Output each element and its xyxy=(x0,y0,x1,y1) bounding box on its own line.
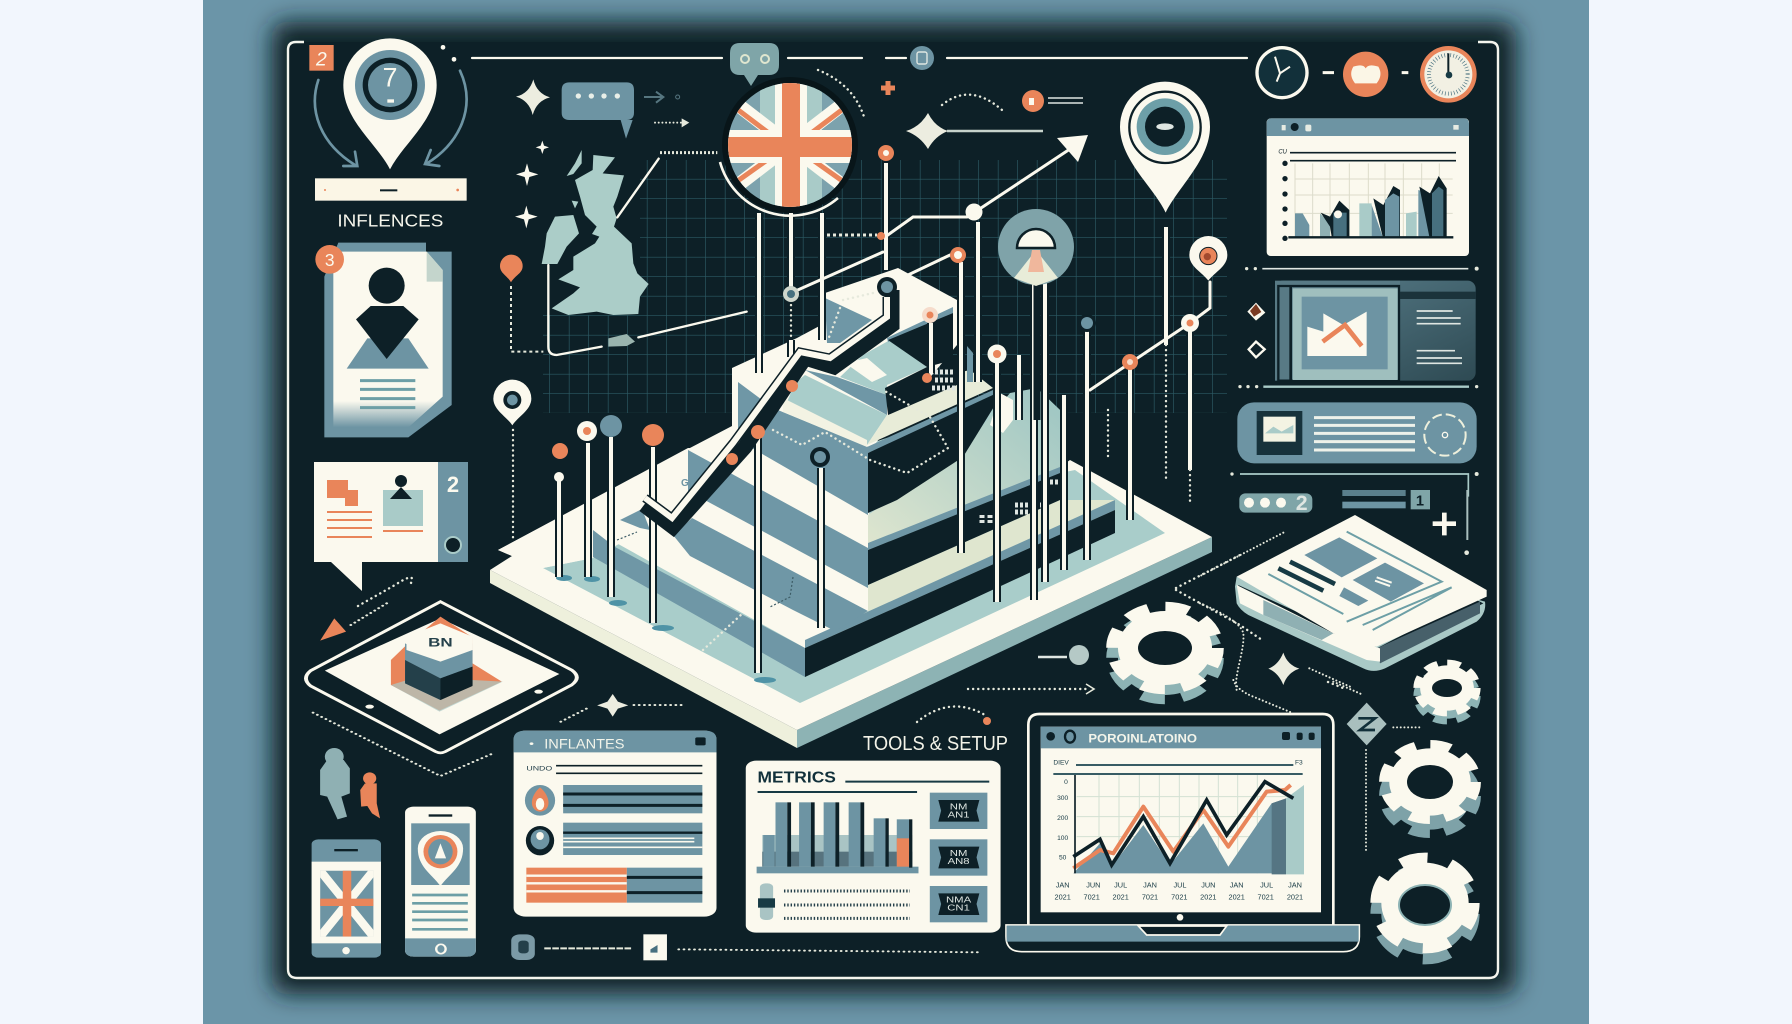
icon: dark circle xyxy=(526,826,554,855)
icon: small xyxy=(758,883,775,920)
pill: 2 xyxy=(1296,491,1308,515)
thumbnail xyxy=(1257,411,1302,455)
chart rules: DIEV xyxy=(1053,760,1069,767)
x axis labels: JAN xyxy=(1230,880,1244,889)
badge: number 2 xyxy=(309,45,334,71)
label: CU xyxy=(1278,149,1288,155)
divider one xyxy=(1245,267,1479,271)
icon: document circle xyxy=(910,46,934,70)
stair dashes xyxy=(773,390,948,473)
inner shadow area xyxy=(543,388,1165,703)
small label: Graa xyxy=(681,478,704,489)
icon: flame xyxy=(525,785,555,816)
x axis labels: JUL xyxy=(1173,880,1187,889)
panel: profile card xyxy=(315,243,452,437)
icon: bottom device xyxy=(511,934,535,960)
upper dark face B xyxy=(885,367,957,415)
dotted connector xyxy=(1200,603,1350,690)
text lines xyxy=(360,381,415,408)
envelope xyxy=(1307,312,1367,356)
printed dots on band xyxy=(982,482,1060,525)
badge: number 2: 2 xyxy=(315,49,327,70)
chart axis xyxy=(1288,234,1453,241)
divider three xyxy=(1230,472,1479,497)
upper dark face A xyxy=(888,313,953,367)
icon: circle xyxy=(445,537,461,553)
union flag xyxy=(725,83,855,207)
pin: orange xyxy=(500,255,523,282)
gears xyxy=(1116,609,1475,956)
black line xyxy=(1073,782,1293,865)
stat tiles: NMA xyxy=(946,896,972,905)
icon: orange circle xyxy=(1022,90,1044,112)
x axis labels: 7021 xyxy=(1142,892,1158,901)
dotted connectors xyxy=(313,602,686,776)
icon: orange plus xyxy=(881,81,895,95)
dotted connector xyxy=(358,578,412,606)
icon: teal person xyxy=(320,748,350,819)
gear: upper side xyxy=(1116,619,1214,697)
connector xyxy=(544,945,632,951)
dotted connector xyxy=(1200,533,1283,576)
notebook lines xyxy=(1268,532,1452,630)
tile: 1 xyxy=(1416,493,1424,509)
dotted connector xyxy=(827,234,877,236)
tier 1 lip xyxy=(805,500,1115,648)
stat tiles: AN1 xyxy=(948,811,970,820)
pole feet xyxy=(556,575,776,683)
y axis labels xyxy=(1057,779,1069,861)
tier 2 dark face xyxy=(868,473,1060,585)
icon: dots xyxy=(441,45,456,62)
y axis labels: 300 xyxy=(1057,795,1069,802)
chart grid xyxy=(1295,163,1453,237)
lower dashes xyxy=(703,613,743,650)
bars: orange stripes xyxy=(526,868,702,903)
tier 1 tread xyxy=(805,500,1115,648)
x axis labels: 7021 xyxy=(1171,892,1187,901)
icon: gauge xyxy=(1420,46,1477,103)
upper cream patch xyxy=(845,358,887,382)
pin: big xyxy=(1120,82,1210,213)
bars: row one xyxy=(563,785,702,813)
icon: sparkles xyxy=(515,141,549,228)
plus xyxy=(597,694,628,717)
orange line xyxy=(1073,785,1291,868)
bars: row two xyxy=(563,823,702,855)
side tab xyxy=(438,462,468,562)
tier 3 cream strip xyxy=(783,398,867,447)
speech bubble xyxy=(562,82,634,139)
x axis labels: 2021 xyxy=(1113,892,1129,901)
stat tiles: AN8 xyxy=(948,857,970,866)
upper lip xyxy=(887,307,953,342)
x axis labels: JAN xyxy=(1143,880,1157,889)
top centre xyxy=(720,43,1083,286)
icon: small circle xyxy=(676,95,680,99)
laptop xyxy=(1006,680,1422,952)
tablet: BN xyxy=(428,637,453,650)
side lines xyxy=(1417,311,1462,363)
connector: dotted pole extensions xyxy=(791,300,1190,505)
lines: UNDO xyxy=(526,765,552,772)
chart rules: F3 xyxy=(1295,760,1303,767)
blue background band xyxy=(203,0,1589,1024)
gauge icon xyxy=(998,209,1074,286)
laptop body xyxy=(1028,714,1333,925)
icon: person silhouette xyxy=(347,268,429,369)
icon: dial xyxy=(1424,414,1466,456)
pin: small cream xyxy=(493,380,531,425)
pill xyxy=(1239,491,1312,515)
panel frame xyxy=(288,42,1498,978)
chart grid xyxy=(1077,775,1303,873)
bar chart xyxy=(757,802,918,873)
x axis labels: 7021 xyxy=(1084,892,1100,901)
bars xyxy=(1342,490,1406,508)
x axis labels: 2021 xyxy=(1229,892,1245,901)
gear: middle face xyxy=(1387,747,1473,817)
stepped silhouette xyxy=(498,268,957,648)
dotted connector xyxy=(679,949,981,952)
icon: orange badge 3 xyxy=(315,245,344,274)
gear: middle side xyxy=(1387,761,1473,831)
icon: diamond xyxy=(906,113,948,149)
main dark panel xyxy=(288,42,1498,978)
x axis labels: 2021 xyxy=(1055,892,1071,901)
map: United Kingdom and Ireland xyxy=(542,150,649,315)
top teal wedge xyxy=(825,298,872,343)
x axis labels: 2021 xyxy=(1287,892,1303,901)
gear hole xyxy=(1138,631,1192,665)
icon: small diamond orange xyxy=(1247,303,1265,321)
right stub xyxy=(967,346,973,382)
connector: gear node xyxy=(1038,645,1089,665)
tier 3 dark face xyxy=(868,393,1000,513)
chart line xyxy=(644,290,892,527)
printed dots on dark xyxy=(932,372,955,388)
notebook image xyxy=(1304,537,1377,577)
x axis labels: JUN xyxy=(1201,880,1215,889)
tier 2 lip xyxy=(868,467,1060,550)
chart rules xyxy=(1053,760,1303,774)
flag arc xyxy=(720,162,838,216)
arrow: growth arrowhead xyxy=(1057,135,1088,162)
notebook xyxy=(1235,515,1487,671)
phone: pin xyxy=(405,807,476,957)
phone: flag xyxy=(312,839,381,958)
image xyxy=(1302,297,1388,369)
heading: metrics: METRICS xyxy=(758,768,836,786)
gear: bottom face xyxy=(1379,861,1471,945)
top rule xyxy=(472,57,1247,59)
platform right edge xyxy=(797,537,1212,748)
tier 1 dark face xyxy=(805,510,1115,677)
gear hole middle xyxy=(1407,765,1453,799)
laptop base xyxy=(1006,925,1359,952)
tile xyxy=(1411,490,1430,509)
icon: small box xyxy=(608,334,635,347)
rules xyxy=(1290,153,1456,161)
gear hole small xyxy=(1432,679,1462,697)
tier 3 left block xyxy=(738,382,868,515)
icon: main map pin: 7 xyxy=(383,63,397,93)
plus xyxy=(1433,513,1456,535)
connector: diamond badge xyxy=(1347,703,1387,745)
x axis labels: JAN xyxy=(1288,880,1302,889)
arrow: small gray xyxy=(644,92,663,103)
tier 2 left face xyxy=(688,450,868,588)
lines xyxy=(327,512,423,537)
stat tiles: NM xyxy=(950,849,967,858)
notebook picture xyxy=(1353,563,1424,602)
mid stripe xyxy=(673,518,868,631)
icon: orange badge 3: 3 xyxy=(325,250,334,270)
arrow: dotted xyxy=(968,684,1094,694)
gear: small face xyxy=(1419,664,1475,712)
laptop screen xyxy=(1041,727,1321,912)
dotted text xyxy=(784,891,910,918)
x axis labels: JAN xyxy=(1056,880,1070,889)
gear: small side xyxy=(1419,672,1475,720)
connector: map line xyxy=(548,265,747,355)
y axis labels: 50 xyxy=(1059,854,1067,861)
dashed arcs xyxy=(818,70,1002,120)
arrow: left curve xyxy=(315,80,357,166)
notebook text xyxy=(1278,562,1335,591)
stat tiles: NM xyxy=(950,803,967,812)
bottom-left group xyxy=(306,602,1001,960)
dotted connector xyxy=(1366,727,1422,853)
upper teal strip xyxy=(805,370,887,415)
dash xyxy=(1323,68,1408,77)
dotted arc xyxy=(917,706,991,725)
y axis labels: 200 xyxy=(1057,815,1069,822)
icon: orange triangle xyxy=(320,618,346,641)
connector lines xyxy=(791,147,1210,390)
panel: metrics xyxy=(746,761,1001,933)
lines xyxy=(526,765,702,773)
arrow: dotted xyxy=(655,118,689,127)
pin dotted connector xyxy=(512,430,514,540)
icon: small diamond outline xyxy=(1249,342,1265,357)
window header xyxy=(1041,727,1321,748)
lines xyxy=(1314,418,1415,450)
panel: media strip xyxy=(1237,402,1477,463)
tier 3 tread xyxy=(867,370,993,445)
icon: mini person xyxy=(383,475,423,526)
poles xyxy=(559,163,1190,673)
icon: orange person xyxy=(360,772,380,818)
icon: clock xyxy=(1255,46,1309,99)
strip xyxy=(1287,286,1295,381)
inner panel xyxy=(1293,288,1398,380)
upper pale tread xyxy=(840,340,927,395)
icon: orange circle xyxy=(1343,52,1388,97)
notebook button xyxy=(1339,587,1368,606)
y axis labels: 0 xyxy=(1064,779,1068,786)
icon: main map pin xyxy=(343,38,437,169)
flag shadow ring xyxy=(722,77,858,213)
header marks xyxy=(530,737,706,745)
x axis labels xyxy=(1055,880,1303,901)
panel: video card xyxy=(1275,281,1476,381)
tier 3 lip xyxy=(867,390,993,453)
icon: small document xyxy=(643,934,667,960)
platform top xyxy=(490,448,1212,730)
notebook group xyxy=(1200,490,1487,690)
chart area xyxy=(1073,798,1287,873)
chart bars xyxy=(1295,176,1447,237)
gauge pole xyxy=(1034,262,1040,420)
speech bubble: top xyxy=(730,43,779,86)
arrow: right curve xyxy=(425,71,467,166)
heading: influences: INFLENCES xyxy=(337,211,443,231)
window controls xyxy=(1282,123,1459,131)
number 2: 2 xyxy=(447,472,459,497)
connector: dotted xyxy=(511,286,543,352)
panel vignette xyxy=(272,22,1516,994)
panel heading: INFLANTES xyxy=(544,736,624,752)
chart title: POROINLATOINO xyxy=(1088,732,1197,746)
dotted connector upper xyxy=(1233,680,1363,713)
panel: small profile card xyxy=(314,462,468,591)
crack line xyxy=(617,532,793,607)
tier 1 left face xyxy=(593,530,805,677)
gear hole bottom xyxy=(1399,885,1451,925)
stat tiles xyxy=(930,793,987,922)
heading: tools and setup: TOOLS & SETUP xyxy=(863,733,1008,755)
x axis labels: JUL xyxy=(1260,880,1273,889)
chart pale column xyxy=(1286,785,1304,874)
orange mark xyxy=(1323,325,1362,346)
dotted connectors xyxy=(1176,555,1343,688)
isometric pyramid xyxy=(490,268,1212,748)
pin: small xyxy=(1189,236,1227,281)
upper dashes xyxy=(828,293,873,340)
background grid xyxy=(543,160,1227,413)
panel: area chart xyxy=(1267,118,1469,256)
connector: diagonal xyxy=(617,159,659,217)
icon: diamond star xyxy=(516,79,550,115)
pole heads xyxy=(552,145,1199,482)
gear: upper face xyxy=(1116,609,1214,687)
tablet xyxy=(306,602,577,753)
divider two xyxy=(1238,385,1478,388)
connector xyxy=(1464,490,1469,555)
twin lines xyxy=(1048,98,1083,103)
panel: influences list xyxy=(514,731,717,917)
rules xyxy=(758,782,989,792)
tier corner fragment xyxy=(620,509,650,530)
y axis labels: 100 xyxy=(1057,835,1069,842)
x axis labels: 7021 xyxy=(1258,892,1274,901)
stat tiles: CN1 xyxy=(947,904,970,913)
right column xyxy=(1120,46,1479,497)
chart axis xyxy=(1072,775,1077,873)
platform left edge xyxy=(490,570,797,748)
x axis labels: 2021 xyxy=(1200,892,1216,901)
icon: orange blocks xyxy=(327,480,358,506)
chart darker column xyxy=(1272,798,1286,874)
tier 3 top xyxy=(787,375,887,445)
back cream block xyxy=(990,393,1013,433)
icon: diamond xyxy=(1268,653,1299,685)
notebook stripes xyxy=(1375,577,1392,586)
laptop camera dot xyxy=(1177,914,1183,921)
header strip xyxy=(1400,292,1476,299)
line xyxy=(947,130,1043,132)
gear: bottom side xyxy=(1379,872,1471,956)
x axis labels: JUL xyxy=(1114,880,1127,889)
connector: dotted flag xyxy=(660,148,717,157)
tier 2 tread xyxy=(868,388,1060,550)
x axis labels: JUN xyxy=(1086,880,1100,889)
label bar xyxy=(315,178,467,201)
top-left column xyxy=(309,38,747,437)
axis xyxy=(1282,161,1288,241)
side strip xyxy=(1278,286,1399,381)
